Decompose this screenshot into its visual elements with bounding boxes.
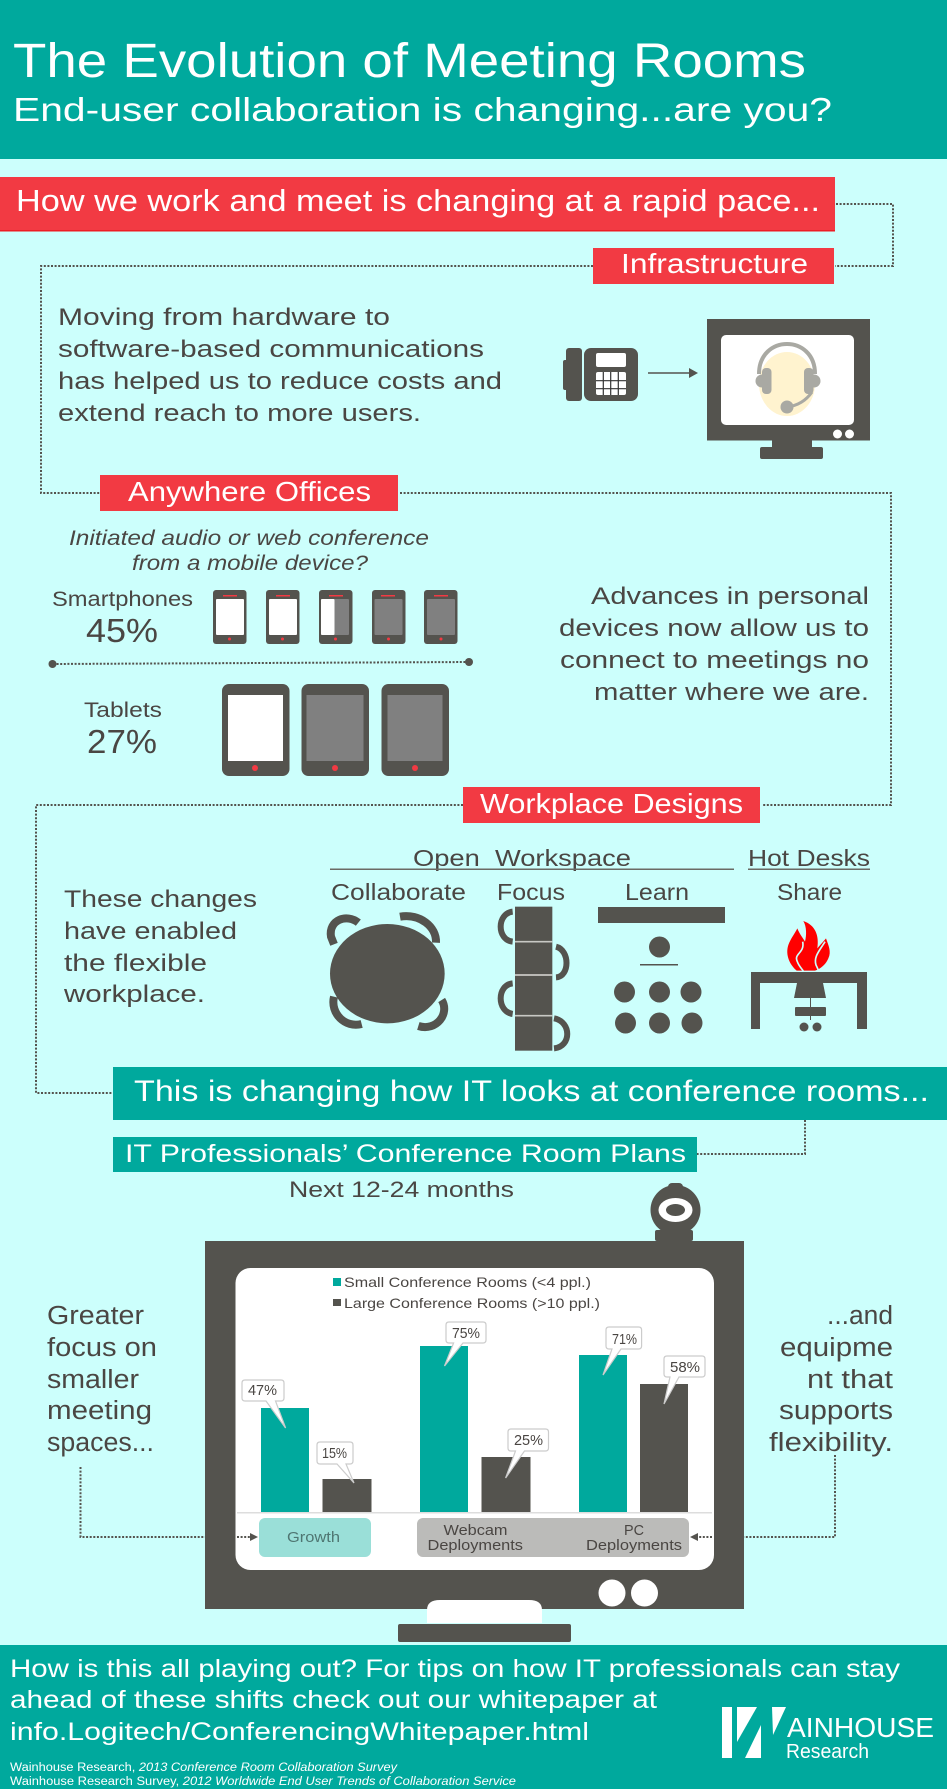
- teal banner: conference rooms: This is changing how IT looks at conference rooms...: [134, 1075, 929, 1108]
- text: hardware to software: software-based communications: [58, 336, 484, 363]
- red banner: rapid pace: How we work and meet is changing at a rapid pace...: [16, 184, 820, 218]
- icon: learn classroom: [598, 907, 725, 1034]
- bar value labels: 15%: [322, 1445, 347, 1462]
- text: flexible equipment: nt that: [807, 1366, 893, 1394]
- sources: [10, 1762, 516, 1788]
- text: smaller spaces: focus on: [47, 1334, 157, 1362]
- connector: anywhere offices to workplace designs: [400, 493, 891, 805]
- text: flexible workplace: have enabled: [64, 918, 237, 945]
- monitor: conference room plans chart: [205, 1241, 744, 1609]
- category: deployments: Deployments: [586, 1537, 682, 1554]
- question text: from a mobile device?: [132, 552, 368, 575]
- text: personal devices: connect to meetings no: [560, 647, 869, 674]
- call to action: info.Logitech/ConferencingWhitepaper.html: [10, 1718, 589, 1746]
- text: smaller spaces: spaces...: [47, 1429, 154, 1457]
- bar value labels: 47%: [248, 1382, 277, 1399]
- text: flexible equipment: equipme: [780, 1334, 893, 1362]
- text: flexible workplace: the flexible: [64, 950, 207, 977]
- red label: workplace designs: [463, 787, 760, 823]
- text: personal devices: matter where we are.: [594, 679, 869, 706]
- divider between devices: [48, 658, 473, 668]
- text: personal devices: [559, 583, 869, 706]
- stat: smartphones 45%: Smartphones: [52, 588, 193, 611]
- sources: Wainhouse Research, 2013 Conference Room Collaboration Survey: [10, 1762, 398, 1774]
- text: flexible equipment: ...and: [827, 1302, 893, 1330]
- logo: Wainhouse Research: AINHOUSE: [787, 1712, 934, 1743]
- bar value labels: 75%: [452, 1325, 480, 1342]
- title: The Evolution of Meeting Rooms: [13, 35, 806, 88]
- icon row: smartphones: [213, 590, 458, 644]
- footer panel: [0, 1645, 947, 1789]
- zone labels: Learn: [625, 879, 689, 905]
- monitor buttons: [598, 1580, 658, 1606]
- red label: workplace designs: Workplace Designs: [480, 788, 743, 819]
- connector: workplace designs to conference rooms banner: [36, 805, 463, 1093]
- stat: smartphones 45%: 45%: [86, 612, 158, 649]
- text: hardware to software: [58, 304, 502, 427]
- red label: infrastructure: [593, 248, 834, 284]
- logo: Wainhouse Research: [722, 1707, 934, 1763]
- monitor stand: [398, 1600, 571, 1642]
- category: deployments: [417, 1518, 689, 1557]
- chart legend: [333, 1274, 600, 1311]
- stat: smartphones 45%: [52, 588, 193, 649]
- zone labels: Focus: [497, 879, 565, 905]
- red label: anywhere offices: [100, 475, 398, 511]
- text: flexible workplace: workplace.: [63, 981, 205, 1008]
- category: deployments: Webcam: [444, 1522, 508, 1539]
- subheading: timeframe: Next 12-24 months: [289, 1177, 514, 1202]
- chart legend: Small Conference Rooms (<4 ppl.): [344, 1274, 591, 1290]
- bar value labels: 25%: [514, 1432, 543, 1449]
- arrow: smaller spaces to growth: [80, 1467, 258, 1541]
- connector: infrastructure to anywhere offices: [41, 266, 593, 493]
- question text: [69, 527, 429, 575]
- zone labels: Share: [777, 879, 842, 905]
- heading: hot desks: Hot Desks: [748, 845, 870, 871]
- bar value labels: [248, 1325, 700, 1462]
- bar value labels: 58%: [670, 1359, 700, 1376]
- stat: tablets 27%: [84, 699, 162, 760]
- header banner: [0, 0, 947, 159]
- text: hardware to software: extend reach to more users.: [58, 400, 421, 427]
- text: personal devices: devices now allow us to: [559, 615, 869, 642]
- category: growth: Growth: [287, 1529, 340, 1546]
- connector: conference banner to plans heading: [697, 1120, 805, 1154]
- text: personal devices: Advances in personal: [591, 583, 869, 610]
- icon: hot desk with flame: [751, 921, 867, 1032]
- teal banner: conference rooms: [113, 1067, 947, 1120]
- text: smaller spaces: [47, 1302, 157, 1457]
- red banner: rapid pace: [0, 177, 835, 232]
- arrow: equipment to deployments: [690, 1455, 835, 1541]
- teal heading: room plans: [113, 1137, 697, 1172]
- text: smaller spaces: Greater: [47, 1302, 145, 1330]
- question text: Initiated audio or web conference: [69, 527, 429, 550]
- call to action: How is this all playing out? For tips on how IT professionals can stay: [10, 1655, 901, 1683]
- sources: Wainhouse Research Survey, 2012 Worldwide End User Trends of Collaboration Service: [10, 1776, 516, 1788]
- stat: tablets 27%: 27%: [87, 723, 157, 760]
- icon: collaborate round table: [330, 916, 445, 1027]
- text: flexible equipment: supports: [779, 1397, 893, 1425]
- connector: intro to infrastructure: [835, 204, 893, 266]
- stat: tablets 27%: Tablets: [84, 699, 162, 722]
- category: deployments: Deployments: [428, 1537, 523, 1554]
- zone labels: Collaborate: [331, 879, 466, 905]
- text: flexible workplace: These changes: [64, 886, 257, 913]
- bar value labels: 71%: [612, 1331, 637, 1348]
- icon: desk phone: [563, 348, 638, 401]
- category: deployments: PC: [624, 1522, 644, 1539]
- text: smaller spaces: meeting: [47, 1397, 152, 1425]
- text: hardware to software: Moving from hardware to: [58, 304, 390, 331]
- icon: monitor with headset user: [707, 319, 870, 459]
- red label: infrastructure: Infrastructure: [621, 248, 808, 279]
- teal heading: room plans: IT Professionals’ Conference Room Plans: [125, 1140, 686, 1168]
- arrow: phone to monitor: [648, 368, 698, 378]
- text: flexible equipment: [769, 1302, 893, 1457]
- subtitle: End-user collaboration is changing...are you?: [13, 91, 832, 128]
- heading: open workspace: Open Workspace: [413, 845, 631, 871]
- text: flexible equipment: flexibility.: [769, 1429, 893, 1457]
- category: growth: [259, 1518, 371, 1557]
- red label: anywhere offices: Anywhere Offices: [128, 476, 371, 507]
- logo: Wainhouse Research: Research: [786, 1741, 869, 1763]
- text: smaller spaces: smaller: [47, 1366, 140, 1394]
- call to action: [10, 1655, 901, 1746]
- call to action: ahead of these shifts check out our whitepaper at: [10, 1686, 657, 1714]
- chart legend: Large Conference Rooms (>10 ppl.): [344, 1295, 600, 1311]
- icon row: tablets: [222, 684, 449, 776]
- text: flexible workplace: [63, 886, 257, 1008]
- bar chart: [237, 1346, 712, 1514]
- icon: focus desks: [501, 907, 567, 1051]
- icon: webcam: [650, 1183, 700, 1241]
- callouts: bar values: [242, 1322, 705, 1483]
- zone labels: [331, 879, 842, 905]
- text: hardware to software: has helped us to reduce costs and: [58, 368, 502, 395]
